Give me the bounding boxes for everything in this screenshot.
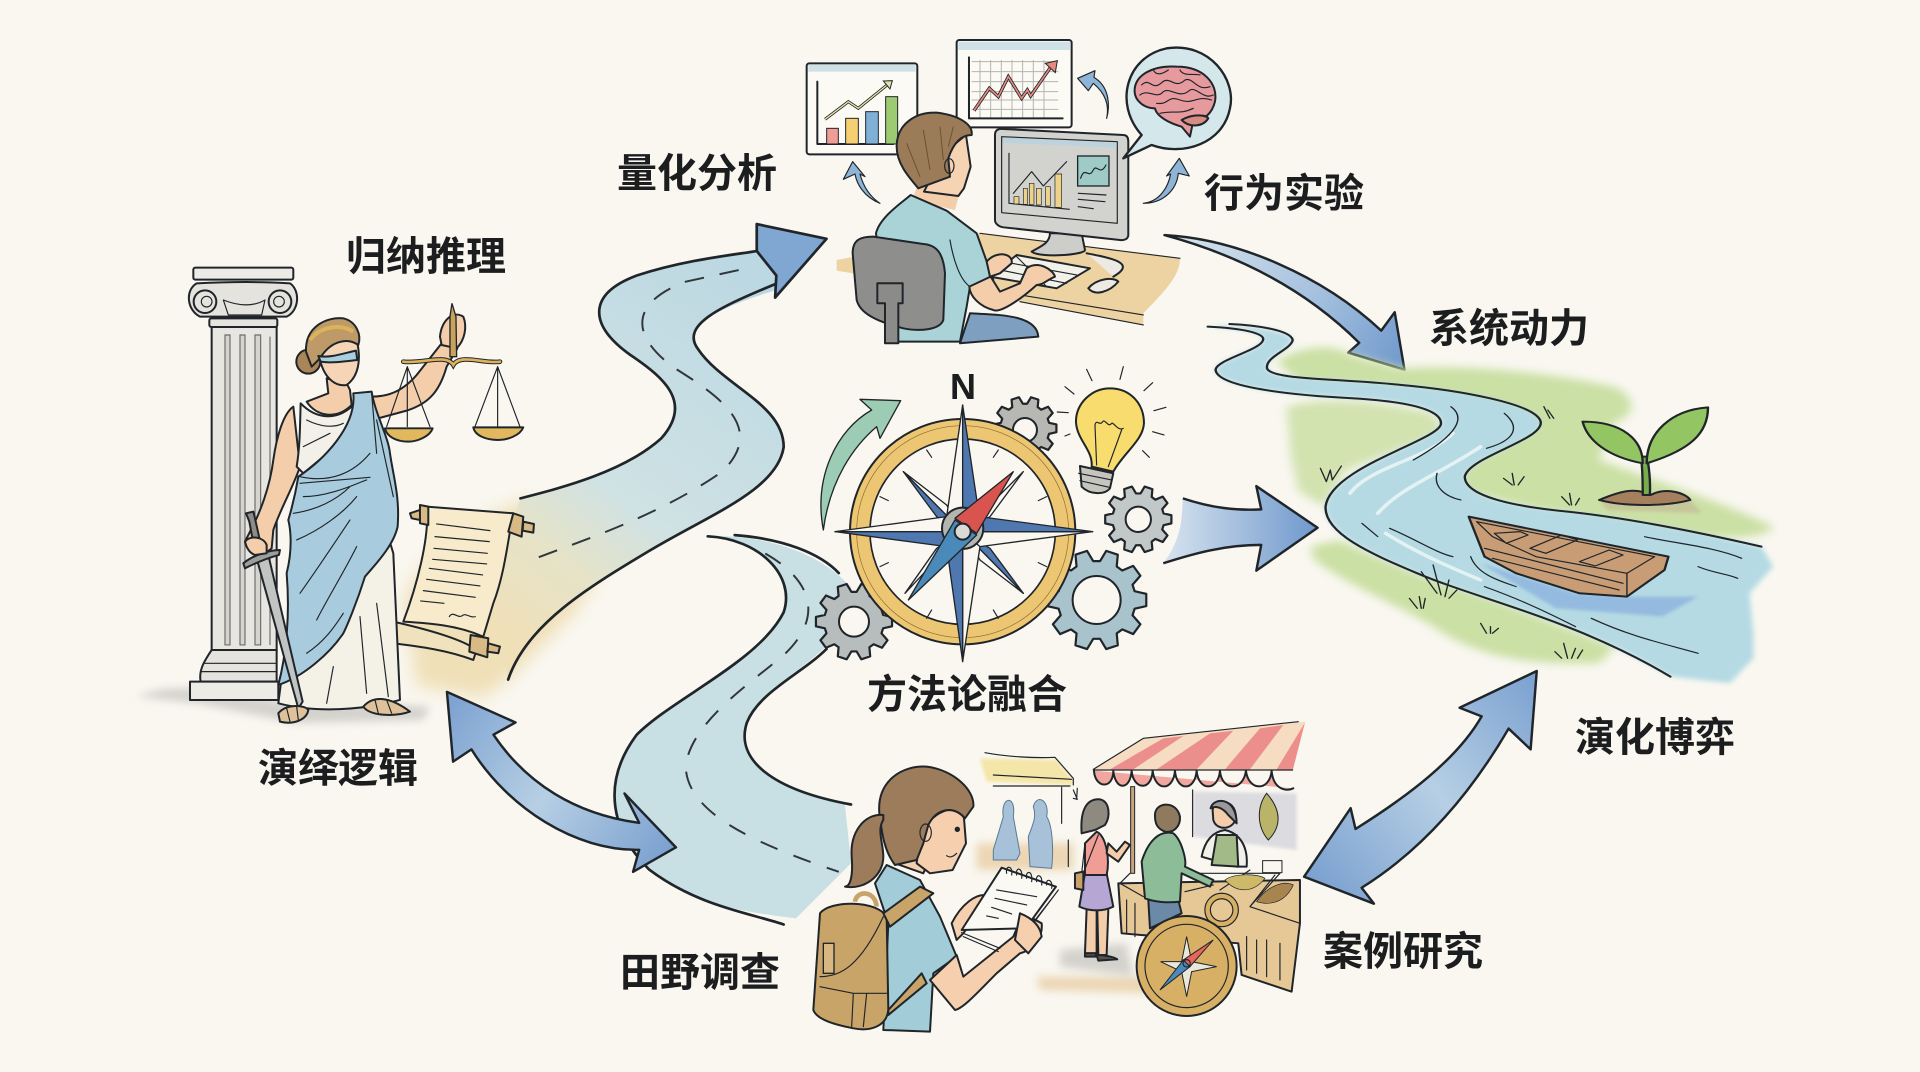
small arrow: brain to chart bbox=[1078, 71, 1108, 118]
forearm and hands bbox=[930, 913, 1042, 1010]
arrow: compass to river bbox=[1163, 486, 1318, 571]
illustration: compass, gears and bulb bbox=[816, 367, 1171, 662]
legs bbox=[960, 313, 1038, 343]
tunic top bbox=[297, 403, 360, 473]
woman customer bbox=[1060, 799, 1133, 977]
scroll bbox=[393, 505, 534, 660]
grass wash: inner bend bbox=[1287, 401, 1445, 507]
label: 归纳推理: 归纳推理 bbox=[346, 235, 506, 279]
label: 演化博弈: 演化博弈 bbox=[1575, 716, 1735, 760]
blue drape bbox=[278, 392, 398, 685]
gear right bbox=[1105, 487, 1171, 552]
river highlights bbox=[1350, 433, 1481, 580]
arms and keyboard bbox=[990, 255, 1090, 288]
mouse and cable bbox=[1087, 253, 1123, 293]
monitor bbox=[995, 129, 1128, 255]
grass wash: lower bank bbox=[1311, 540, 1615, 664]
compass star bbox=[835, 405, 1093, 662]
illustration: river, boat and sprout bbox=[1208, 324, 1773, 683]
chart window: line chart bbox=[957, 40, 1072, 127]
neck bbox=[912, 187, 960, 210]
lowered arm bbox=[245, 407, 300, 553]
illustration: field researcher and market bbox=[813, 722, 1305, 1032]
grass wash: upper bank bbox=[1277, 347, 1773, 538]
small arrow: right bbox=[1143, 158, 1189, 203]
skirt bbox=[278, 477, 400, 709]
river water bbox=[1208, 326, 1773, 683]
sandals bbox=[278, 699, 410, 723]
road: lower winding path bbox=[615, 535, 851, 924]
river bank lines bbox=[1229, 324, 1761, 547]
yellow awning stall bbox=[980, 753, 1077, 868]
chair bbox=[853, 237, 945, 330]
scales bbox=[385, 303, 523, 442]
river ripples bbox=[1362, 407, 1742, 653]
gear left bbox=[816, 584, 892, 659]
label: 量化分析: 量化分析 bbox=[617, 152, 777, 196]
label: 案例研究: 案例研究 bbox=[1323, 930, 1483, 974]
road: upper winding path bbox=[404, 224, 827, 698]
compass ring bbox=[850, 419, 1075, 644]
face bbox=[924, 135, 971, 196]
illustration: analyst at computer bbox=[807, 40, 1231, 343]
label: 系统动力: 系统动力 bbox=[1429, 307, 1589, 351]
sprout bbox=[1583, 407, 1708, 513]
boat bbox=[1469, 517, 1668, 597]
label: 田野调查: 田野调查 bbox=[620, 951, 780, 995]
small arrow: left bbox=[843, 162, 880, 203]
shirt bbox=[875, 865, 957, 1032]
chair post bbox=[877, 283, 903, 343]
gear top bbox=[994, 397, 1056, 459]
desk bbox=[837, 233, 1180, 325]
column bbox=[189, 268, 297, 700]
label: N: N bbox=[950, 366, 976, 407]
arrow: desk to river bbox=[1164, 235, 1405, 370]
gear big bbox=[1047, 551, 1146, 649]
market stall bbox=[1118, 861, 1300, 992]
stall back wash and produce bbox=[1131, 787, 1297, 873]
striped market awning bbox=[1093, 722, 1305, 790]
background market washes bbox=[977, 843, 1153, 993]
head bbox=[296, 318, 359, 385]
arrow: double-headed river to market bbox=[1304, 671, 1537, 904]
grass tufts bbox=[1320, 407, 1583, 658]
label: 行为实验: 行为实验 bbox=[1204, 172, 1364, 216]
vendor bbox=[1202, 801, 1247, 867]
customer in green bbox=[1142, 805, 1213, 928]
green arrow bbox=[821, 399, 901, 530]
notebook bbox=[962, 868, 1056, 930]
illustration: justice statue with column and scroll bbox=[137, 268, 534, 723]
neck and chest bbox=[307, 378, 352, 415]
sword bbox=[243, 512, 303, 708]
boat wake bbox=[1481, 563, 1698, 617]
researcher woman bbox=[813, 767, 1058, 1032]
chart window: bar chart bbox=[807, 63, 917, 154]
label: 演绎逻辑: 演绎逻辑 bbox=[258, 747, 418, 791]
light bulb bbox=[1057, 367, 1166, 493]
person seated bbox=[876, 113, 1090, 343]
ground shadow bbox=[137, 688, 430, 723]
shirt bbox=[876, 195, 993, 342]
backpack bbox=[813, 904, 888, 1029]
brain speech bubble bbox=[1123, 48, 1231, 158]
label: 方法论融合: 方法论融合 bbox=[867, 673, 1067, 717]
arrow: double-headed justice to field bbox=[447, 692, 676, 872]
hair bbox=[879, 767, 973, 865]
raised arm bbox=[372, 343, 457, 418]
pocket compass bbox=[1137, 896, 1237, 1016]
neck and face bbox=[895, 843, 932, 873]
hair bbox=[897, 113, 972, 188]
compass needle bbox=[908, 472, 1013, 600]
